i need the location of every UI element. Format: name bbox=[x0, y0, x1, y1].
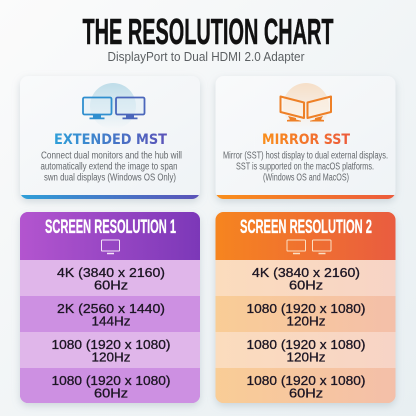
row: 1080 120Hz bbox=[246, 338, 366, 364]
row: 1080 120Hz: 1080 (1920 x 1080) bbox=[52, 338, 170, 352]
heading: screen resolution 1: SCREEN RESOLUTION 1 bbox=[45, 217, 176, 238]
row: 1080 120Hz: 120Hz bbox=[286, 350, 326, 364]
description: mirror SST bbox=[223, 150, 388, 184]
row: 2K 144Hz bbox=[57, 302, 165, 328]
row: 1080 120Hz: 1080 (1920 x 1080) bbox=[246, 302, 366, 316]
row: 1080 120Hz: 120Hz bbox=[92, 350, 130, 364]
row: 1080 120Hz: 1080 (1920 x 1080) bbox=[246, 338, 366, 352]
row: 1080 60Hz bbox=[52, 374, 170, 400]
row: 1080 120Hz bbox=[52, 338, 170, 364]
panel: extended MST bbox=[20, 76, 200, 199]
row: 1080 120Hz bbox=[246, 302, 366, 328]
row: 1080 120Hz: 120Hz bbox=[286, 314, 326, 328]
row: 2K 144Hz: 2K (2560 x 1440) bbox=[57, 302, 165, 316]
heading: mirror SST: MIRROR SST bbox=[262, 132, 350, 148]
panel: screen resolution 1 bbox=[20, 212, 200, 403]
row: 2K 144Hz: 144Hz bbox=[92, 314, 130, 328]
row: 1080 60Hz: 60Hz bbox=[289, 386, 323, 400]
subtitle: DisplayPort to Dual HDMI 2.0 Adapter bbox=[108, 50, 304, 64]
row: 1080 60Hz: 1080 (1920 x 1080) bbox=[246, 374, 366, 388]
panel: mirror SST bbox=[215, 76, 396, 199]
row: 1080 60Hz bbox=[246, 374, 366, 400]
description: mirror SST: (Windows OS and MacOS) bbox=[263, 172, 349, 184]
icon: monitor bbox=[102, 240, 120, 254]
row: 4K 60Hz: 4K (3840 x 2160) bbox=[57, 266, 165, 280]
description: extended MST: swn dual displays (Windows OS Only) bbox=[44, 172, 176, 184]
description: extended MST bbox=[40, 150, 182, 184]
heading: extended MST: EXTENDED MST bbox=[54, 132, 167, 148]
row: 4K 60Hz: 60Hz bbox=[94, 278, 128, 292]
icon: dual monitors bbox=[83, 83, 144, 129]
icon: mirrored monitors bbox=[280, 83, 331, 129]
row: 4K 60Hz: 4K (3840 x 2160) bbox=[252, 266, 360, 280]
row: 1080 60Hz: 60Hz bbox=[94, 386, 128, 400]
row: 4K 60Hz bbox=[57, 266, 165, 292]
panel: screen resolution 2 bbox=[215, 212, 396, 403]
row: 4K 60Hz bbox=[252, 266, 360, 292]
row: 1080 60Hz: 1080 (1920 x 1080) bbox=[52, 374, 170, 388]
row: 4K 60Hz: 60Hz bbox=[289, 278, 323, 292]
icon: two monitors bbox=[287, 240, 331, 254]
description: extended MST: Connect dual monitors and the hub will bbox=[41, 150, 182, 162]
description: extended MST: automatically extend the image to span bbox=[40, 162, 178, 172]
